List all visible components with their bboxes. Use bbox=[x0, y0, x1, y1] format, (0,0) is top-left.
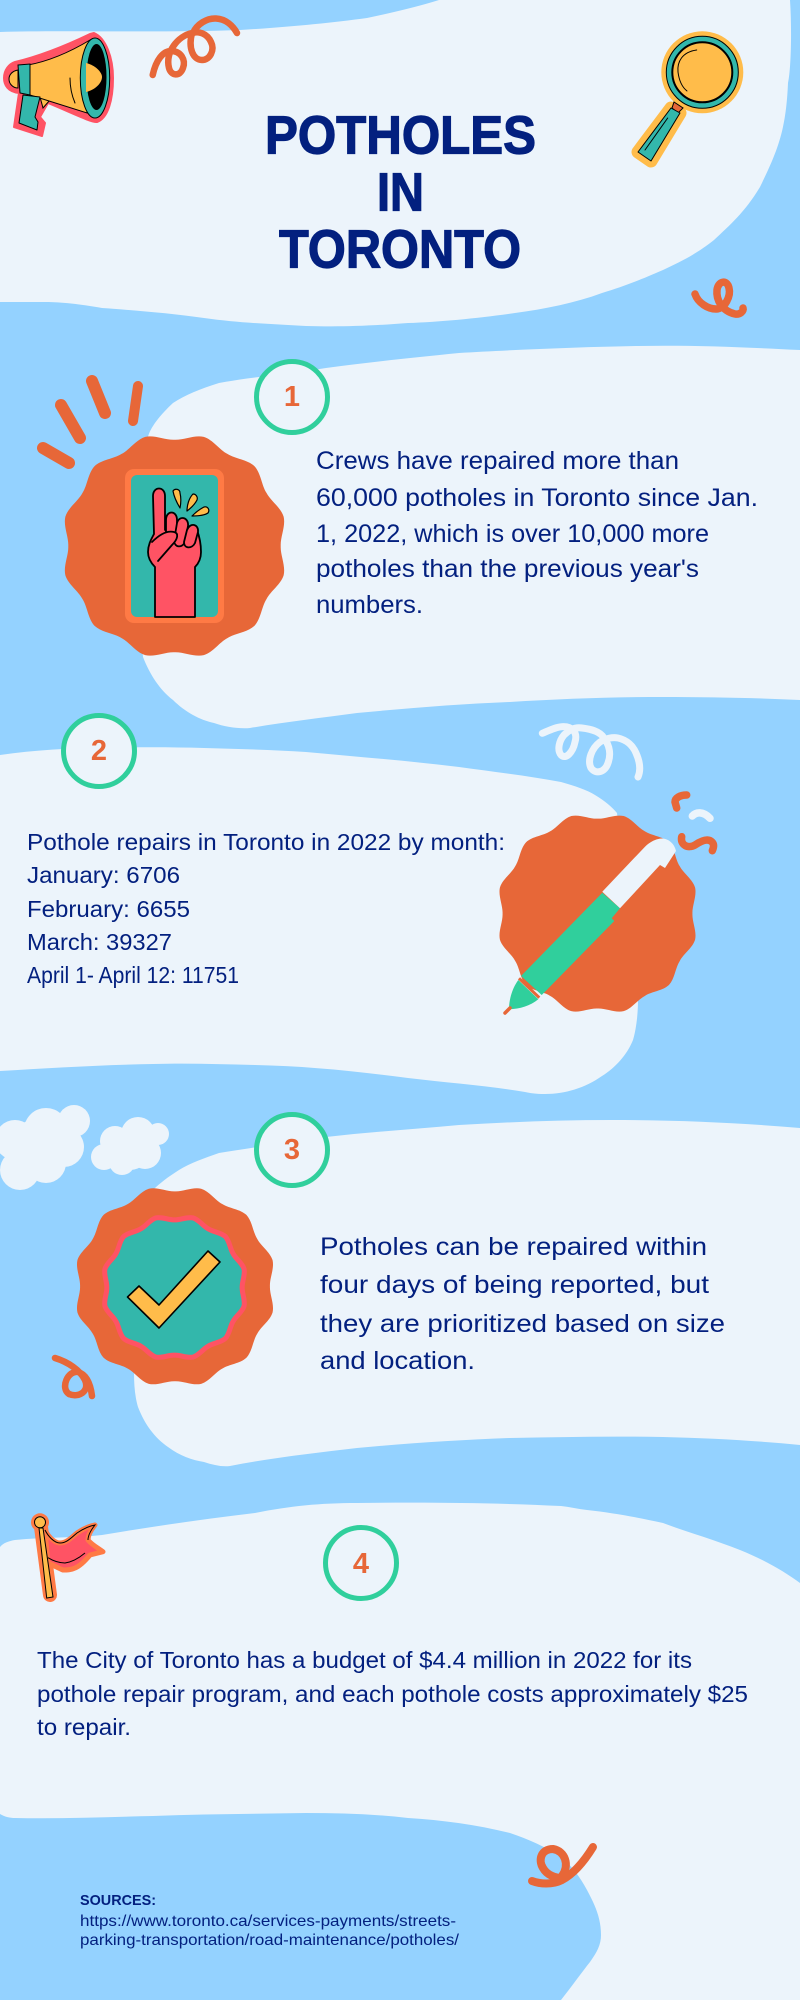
badge: check mark bbox=[77, 1188, 273, 1384]
panel: title background bbox=[0, 0, 791, 326]
text block: section 2: April 1- April 12: 11751 bbox=[27, 962, 239, 988]
number badge 3 bbox=[256, 1114, 328, 1186]
badge: pointing hand bbox=[65, 436, 284, 656]
sources: SOURCES: bbox=[80, 1892, 156, 1909]
icon: check bbox=[128, 1251, 220, 1328]
text block: section 3 bbox=[320, 1233, 725, 1375]
number badge 1 bbox=[256, 362, 328, 432]
icon: pen bbox=[505, 839, 676, 1013]
text block: section 1: Crews have repaired more than bbox=[316, 447, 679, 475]
title: TORONTO bbox=[279, 220, 521, 280]
decoration: orange swirl left bbox=[55, 1358, 92, 1396]
title: IN bbox=[377, 162, 424, 222]
text block: section 3: they are prioritized based on size bbox=[320, 1310, 725, 1338]
icon: clouds bbox=[0, 1105, 169, 1190]
icon: magnifying glass bbox=[638, 31, 743, 161]
text block: section 4: pothole repair program, and each pothole costs approximately $25 bbox=[37, 1681, 748, 1707]
text block: section 1 bbox=[316, 447, 758, 619]
text block: section 1: 60,000 potholes in Toronto since Jan. bbox=[316, 484, 758, 512]
panel: section 1 bbox=[130, 346, 800, 728]
number badge 4 bbox=[326, 1528, 396, 1598]
icon: hand bbox=[148, 488, 201, 617]
text block: section 1: 1, 2022, which is over 10,000 more bbox=[316, 520, 709, 548]
decoration: small orange swirl bbox=[695, 282, 743, 314]
sources: parking-transportation/road-maintenance/potholes/ bbox=[80, 1932, 460, 1949]
icon: flag bbox=[31, 1513, 103, 1598]
panel: section 4 bbox=[0, 1503, 800, 2000]
title: POTHOLES bbox=[265, 106, 536, 166]
sources bbox=[80, 1892, 460, 1949]
number badge 1: 1 bbox=[284, 381, 300, 413]
number badge 2 bbox=[64, 716, 134, 786]
icon: yellow sparks bbox=[173, 489, 209, 516]
text block: section 2: Pothole repairs in Toronto in 2022 by month: bbox=[27, 829, 505, 855]
text block: section 2: March: 39327 bbox=[27, 929, 172, 955]
badge: pen bbox=[499, 816, 696, 1013]
text block: section 3: four days of being reported, but bbox=[320, 1271, 709, 1299]
text block: section 2: February: 6655 bbox=[27, 896, 190, 922]
text block: section 1: potholes than the previous year's bbox=[316, 555, 699, 583]
number badge 3: 3 bbox=[284, 1134, 300, 1166]
number badge 4: 4 bbox=[353, 1548, 369, 1580]
text block: section 2 bbox=[27, 829, 505, 988]
number badge 2: 2 bbox=[91, 735, 107, 767]
text block: section 1: numbers. bbox=[316, 591, 423, 619]
decoration: marks by pen bbox=[675, 795, 714, 851]
text block: section 4: to repair. bbox=[37, 1714, 131, 1740]
text block: section 3: and location. bbox=[320, 1347, 475, 1375]
decoration: white swirl bbox=[542, 727, 640, 777]
decoration: orange burst marks bbox=[43, 381, 138, 463]
panel: section 2 bbox=[0, 747, 638, 1094]
sources: https://www.toronto.ca/services-payments/streets- bbox=[80, 1913, 456, 1930]
decoration: orange swirl bottom bbox=[532, 1847, 593, 1884]
panel: section 3 bbox=[130, 1120, 800, 1466]
text block: section 3: Potholes can be repaired within bbox=[320, 1233, 707, 1261]
decoration: orange swirl top bbox=[153, 18, 237, 75]
title bbox=[265, 106, 536, 280]
text block: section 4 bbox=[37, 1647, 748, 1740]
text block: section 2: January: 6706 bbox=[27, 862, 180, 888]
text block: section 4: The City of Toronto has a budget of $4.4 million in 2022 for its bbox=[37, 1647, 692, 1673]
icon: megaphone bbox=[4, 33, 113, 136]
